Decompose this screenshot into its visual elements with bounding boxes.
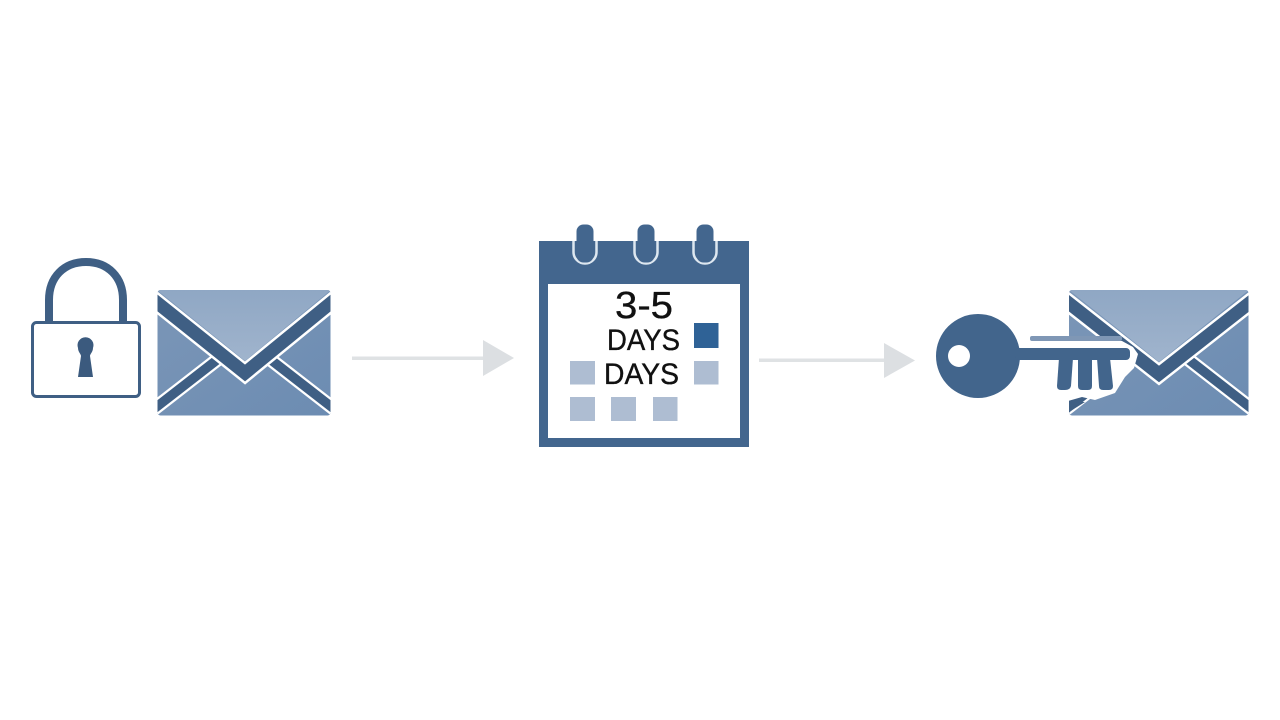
calendar rings [574,224,716,264]
unlocked envelope [1061,290,1257,416]
broken envelope area [1025,341,1138,401]
key highlight strip [1030,336,1122,341]
icon: closed envelope [150,290,338,416]
calendar text: 3-5: 3-5 [615,285,673,327]
icon: padlock [32,262,140,396]
calendar day squares [570,323,718,421]
calendar text: DAYS repeated: DAYS [604,358,679,391]
icon: calendar [539,224,749,447]
icon: key [936,314,1130,398]
calendar text: DAYS: DAYS [607,324,680,357]
icon: envelope opened by key [936,290,1257,416]
arrow: calendar to key [759,343,915,378]
arrow: lock to calendar [352,340,514,376]
